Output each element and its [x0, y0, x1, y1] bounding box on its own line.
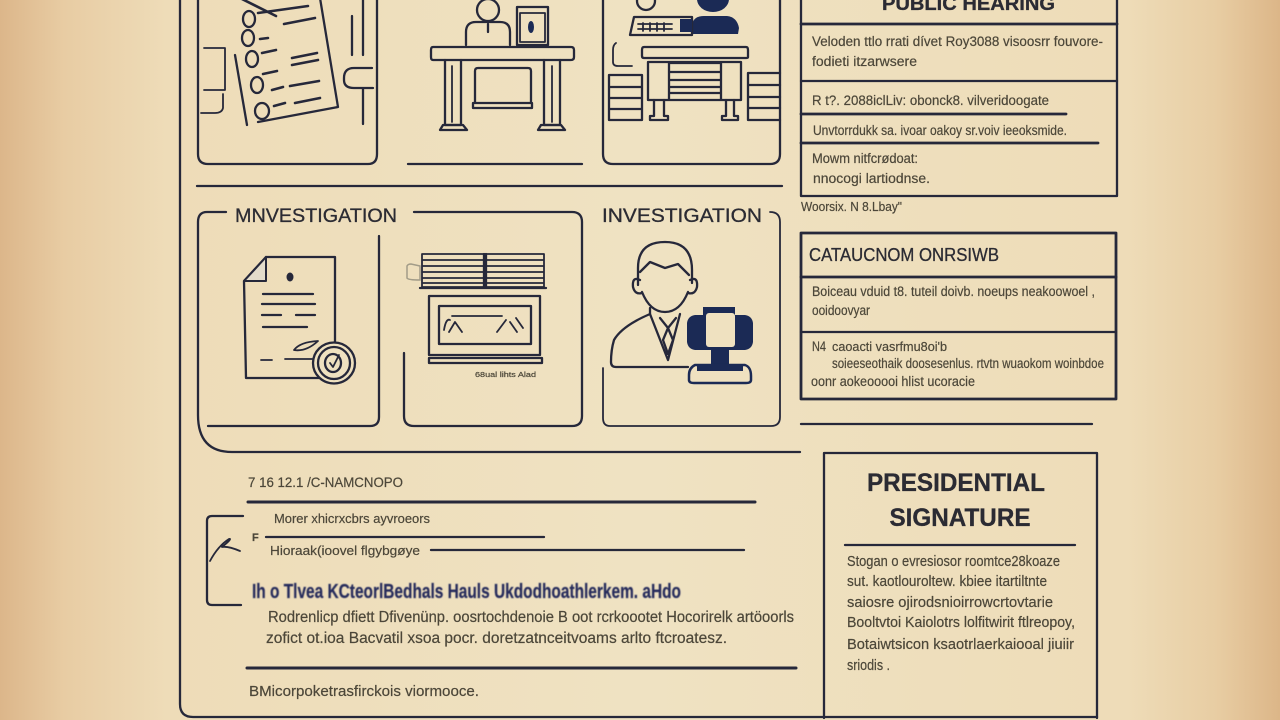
footnote: Woorsix. N 8.Lbay"	[801, 200, 902, 214]
icon: blinds over framed display	[407, 254, 546, 363]
icon: tilted checklist	[201, 0, 373, 125]
text rows: sriodis .	[847, 658, 890, 674]
text rows: saiosre ojirodsnioirrowcrtovtarie	[847, 595, 1053, 611]
panel: legislative record	[207, 474, 796, 700]
panel: investigation evidence	[404, 212, 582, 426]
text rows: Botaiwtsicon ksaotrlaerkaiooal jiuiir	[847, 637, 1074, 653]
text rows: Veloden ttlo rrati dívet Roy3088 visoosrr fouvore-	[812, 34, 1103, 49]
panel: checklist	[198, 0, 377, 164]
icon: official with camera	[611, 242, 753, 383]
text rows: Boiceau vduid t8. tuteil doivb. noeups neakoowoel ,	[812, 284, 1095, 299]
panel: legislative record: Morer xhicrxcbrs ayvroeors	[274, 511, 430, 526]
panel: catalog overview	[801, 233, 1116, 399]
outer document frame	[180, 0, 1097, 717]
text rows: Booltvtoi Kaiolotrs lolfitwirit ftlreopoy,	[847, 615, 1075, 631]
divider	[197, 185, 782, 187]
text rows	[811, 284, 1104, 389]
blurred signature line: Ih o Tlvea KCteorlBedhals Hauls Ukdodhoathlerkem. aHdo	[252, 581, 681, 603]
icon: signed document with seal	[244, 257, 355, 384]
text rows: R t?. 2088iclLiv: obonck8. vilveridoogate	[812, 93, 1049, 108]
icon: desk, official and laptop	[431, 0, 574, 130]
text rows: soieeseothaik doosesenlus. rtvtn wuaokom woinbdoe	[832, 356, 1104, 371]
text rows: fodieti itzarwsere	[812, 54, 917, 69]
panel: legislative record: F	[252, 532, 259, 544]
paragraph	[266, 609, 794, 647]
panel: public hearing	[801, 0, 1117, 196]
heading: presidential signature: PRESIDENTIAL	[867, 469, 1045, 497]
panel: investigation interview	[602, 206, 780, 426]
caption under display: 68ual lihts Alad	[475, 370, 536, 379]
text rows: Mowm nitfcrødoat:	[812, 151, 918, 166]
text rows: sut. kaotlouroltew. kbiee itartiltnte	[847, 574, 1047, 590]
icon: figure at bench with cabinets	[609, 0, 780, 120]
text rows	[847, 554, 1075, 674]
record heading: 7 16 12.1 /C-NAMCNOPO	[248, 474, 403, 490]
divider	[801, 423, 1092, 425]
text rows: N4	[812, 339, 826, 354]
text rows: Unvtorrdukk sa. ivoar oakoy sr.voiv ieeoksmide.	[813, 123, 1067, 138]
text rows: ooidoovyar	[812, 303, 870, 318]
heading: investigation left: MNVESTIGATION	[235, 206, 397, 227]
text rows: oonr aokeooooi hlist ucoracie	[811, 374, 975, 389]
bracket with signature mark	[207, 516, 243, 605]
panel: investigation document	[198, 206, 800, 452]
heading: presidential signature: SIGNATURE	[890, 504, 1030, 532]
panel: hearing room	[603, 0, 780, 164]
paragraph: zofict ot.ioa Bacvatil xsoa pocr. doretzatnceitvoams arlto ftcroatesz.	[266, 630, 727, 647]
heading: catalog: CATAUCNOM ONRSIWB	[809, 245, 999, 265]
heading: investigation right: INVESTIGATION	[602, 206, 762, 227]
text rows: nnocogi lartiodnse.	[813, 171, 930, 186]
panel: presidential signature	[824, 453, 1097, 718]
text rows: caoacti vasrfmu8oi'b	[832, 339, 947, 354]
panel: desk with official	[408, 0, 582, 164]
text rows: Stogan o evresiosor roomtce28koaze	[847, 554, 1060, 570]
paragraph: Rodrenlicp dfiett Dfivenünp. oosrtochdenoie B oot rcrkoootet Hocorirelk artöoorls	[268, 609, 794, 626]
heading: presidential signature	[867, 469, 1045, 532]
record footer: BMicorpoketrasfirckois viormooce.	[249, 683, 479, 700]
text rows	[812, 34, 1103, 186]
panel: legislative record: Hioraak(ioovel flgybgøye	[270, 543, 420, 558]
